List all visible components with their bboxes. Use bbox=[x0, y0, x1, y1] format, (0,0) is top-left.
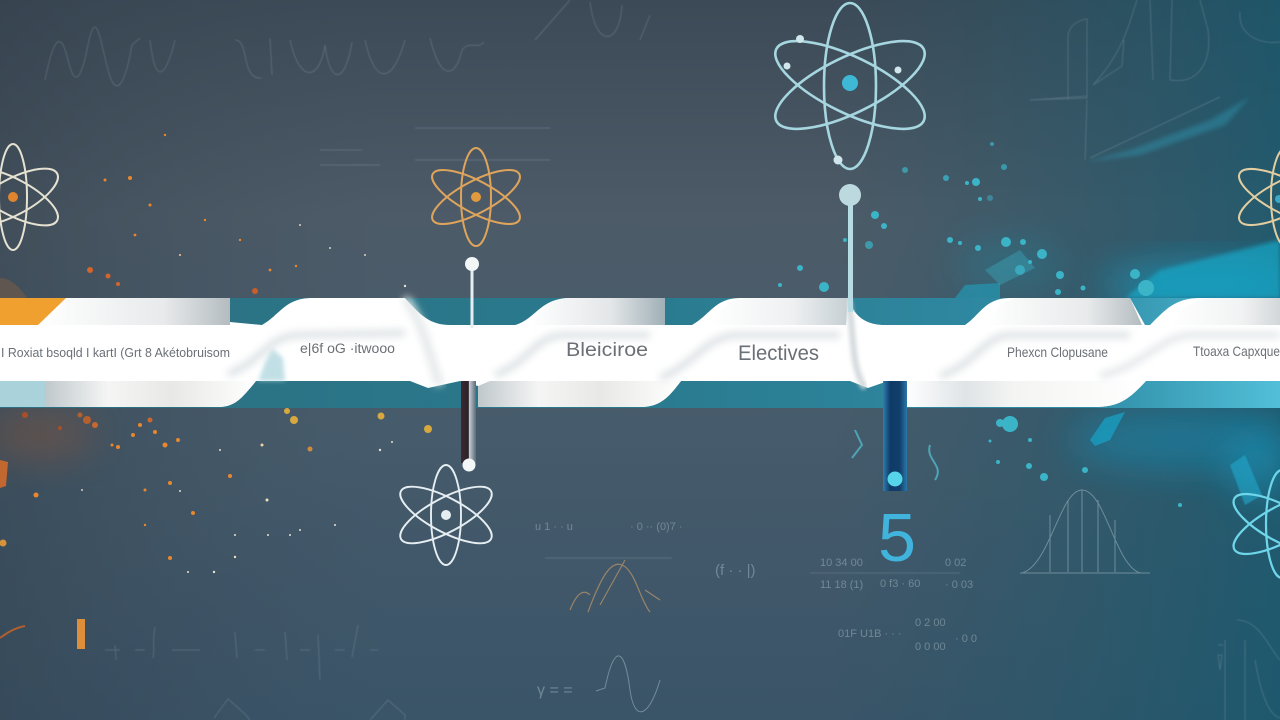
faint formula text: · 0 ·· (0)7 · bbox=[630, 521, 683, 533]
number 5: 5 bbox=[878, 500, 916, 576]
ribbon white body bbox=[0, 298, 1280, 407]
orange splatter bbox=[0, 134, 432, 638]
ribbon shaded folds bbox=[0, 298, 1280, 407]
ribbon labels bbox=[1, 340, 1280, 365]
faint formula text: 10 34 00 bbox=[820, 557, 863, 569]
atom: right edge top bbox=[1232, 148, 1280, 246]
faint formula text: γ = = bbox=[537, 682, 573, 699]
faint formula text: 0 02 bbox=[945, 557, 966, 569]
faint formula text: u 1 · · u bbox=[535, 521, 573, 533]
orange ribbon tab bbox=[0, 298, 66, 325]
faint formula text: 01F U1B · · · bbox=[838, 628, 902, 640]
label 1: I Roxiat bsoqld I kartI (Grt 8 Akétobruisom bbox=[1, 346, 230, 360]
atom: white bbox=[393, 465, 499, 565]
pin: lower left bbox=[461, 381, 476, 472]
faint formula text: 11 18 (1) bbox=[820, 579, 863, 591]
label 5: Phexcn Clopusane bbox=[1007, 344, 1108, 360]
faint formula text: 0 0 00 bbox=[915, 641, 946, 653]
pin: upper right bbox=[839, 184, 861, 312]
faint formula text: 0 f3 · 60 bbox=[880, 578, 920, 590]
label 4: Electives bbox=[738, 342, 819, 365]
faint formula text: (f · · |) bbox=[715, 562, 756, 579]
atom: large cyan bbox=[764, 3, 936, 169]
atom: orange bbox=[425, 148, 527, 246]
ribbon teal backing bbox=[0, 298, 1280, 408]
faint formula text bbox=[535, 521, 977, 699]
atom: left edge bbox=[0, 144, 66, 250]
pin: upper left bbox=[465, 257, 479, 328]
faint formula text: 0 2 00 bbox=[915, 617, 946, 629]
orange marker bbox=[77, 619, 85, 649]
cyan splatter bbox=[778, 142, 1182, 507]
label 2: e|6f oG ·itwooo bbox=[300, 341, 395, 356]
atom: right edge bottom bbox=[1226, 470, 1280, 578]
faint formula text: · 0 03 bbox=[945, 579, 973, 591]
label 3: Bleiciroe bbox=[566, 340, 648, 361]
faint formula text: · 0 0 bbox=[955, 633, 977, 645]
orange sketch bbox=[570, 560, 660, 612]
pin: lower right bbox=[883, 381, 907, 491]
bell curve and wave sketches bbox=[596, 490, 1150, 712]
